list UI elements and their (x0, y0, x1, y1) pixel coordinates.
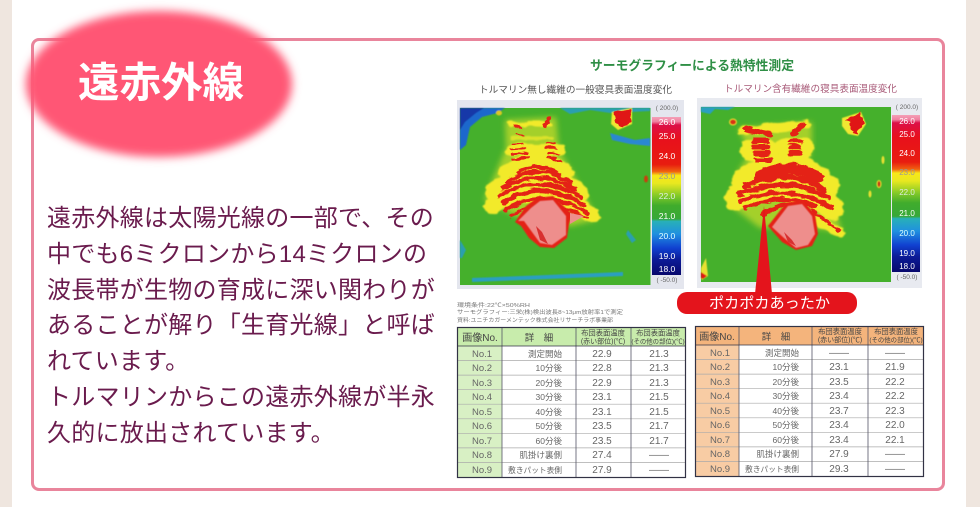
table: without tourmaline: 22.9 (592, 378, 612, 389)
table: with tourmaline: No.1 (710, 348, 730, 359)
table: with tourmaline: ―― (885, 348, 905, 359)
table: with tourmaline: 22.2 (885, 391, 905, 402)
body text: 遠赤外線は太陽光線の一部で、その (47, 205, 434, 232)
table: without tourmaline: 肌掛け裏側 (519, 450, 562, 460)
body text: れています。 (47, 348, 189, 375)
colour scale: left: 25.0 (659, 131, 676, 141)
hot spot: left image (614, 109, 631, 128)
table: without tourmaline: 布団表面温度 (581, 328, 625, 338)
table: with tourmaline: 布団表面温度 (818, 327, 862, 336)
heading: thermography: サーモグラフィーによる熱特性測定 (590, 58, 794, 73)
table: without tourmaline: 27.4 (592, 450, 612, 461)
table: with tourmaline: 23.4 (829, 391, 849, 402)
table: with tourmaline: 23.5 (829, 377, 849, 388)
table: without tourmaline: 30分後 (536, 392, 562, 402)
table: with tourmaline: 40分後 (773, 406, 799, 416)
table: with tourmaline: 23.4 (829, 435, 849, 446)
table: without tourmaline: 画像No. (462, 331, 498, 344)
table: without tourmaline: 22.8 (592, 363, 612, 374)
table: with tourmaline: 測定開始 (765, 348, 799, 358)
side band left (0, 0, 12, 507)
colour scale: right: 26.0 (899, 117, 915, 126)
table: without tourmaline: 詳 細 (525, 332, 553, 344)
table: with tourmaline: 20分後 (773, 377, 799, 387)
colour scale: left: 24.0 (659, 151, 676, 161)
table: with tourmaline: 22.0 (885, 420, 905, 431)
table: without tourmaline: 21.7 (649, 421, 669, 432)
colour scale: right: 25.0 (899, 130, 915, 139)
table: with tourmaline: 22.3 (885, 406, 905, 417)
table: with tourmaline: ―― (829, 348, 849, 359)
table: with tourmaline: 30分後 (773, 391, 799, 401)
table: without tourmaline: 布団表面温度 (636, 328, 680, 338)
table: without tourmaline: 20分後 (536, 378, 562, 388)
colour scale: right: 24.0 (899, 149, 915, 158)
body text: 久的に放出されています。 (47, 420, 335, 447)
table: without tourmaline: 22.9 (592, 349, 612, 360)
table: with tourmaline: No.7 (710, 435, 730, 446)
colour scale: right: ( -50.0) (897, 274, 917, 281)
colour scale: left: 20.0 (659, 231, 676, 241)
table: without tourmaline: 10分後 (536, 363, 562, 373)
caption: test conditions: 資料:ユニチカガーメンテック株式会社リサーチラボ事業部 (457, 316, 613, 324)
colour scale: right: 19.0 (899, 249, 915, 258)
table: without tourmaline: 測定開始 (528, 349, 562, 359)
table: without tourmaline: 敷きパット表側 (508, 465, 562, 475)
colour scale: right: 21.0 (899, 209, 915, 218)
table: without tourmaline: 23.1 (592, 392, 612, 403)
table: without tourmaline: No.7 (472, 436, 492, 447)
table: without tourmaline: 23.1 (592, 407, 612, 418)
colour scale: left: ( 200.0) (656, 105, 678, 112)
table: with tourmaline: No.9 (710, 464, 730, 475)
callout: warm label (677, 206, 857, 314)
colour scale: right: 23.0 (899, 168, 915, 177)
table: without tourmaline: No.4 (472, 392, 492, 403)
table: without tourmaline: 21.3 (649, 349, 669, 360)
table: with tourmaline: ―― (885, 449, 905, 460)
body text: 中でも6ミクロンから14ミクロンの (47, 241, 427, 268)
table: without tourmaline: 21.3 (649, 378, 669, 389)
table: with tourmaline: 敷きパット表側 (745, 464, 799, 474)
table: with tourmaline: 50分後 (773, 420, 799, 430)
hot spot: right image (845, 113, 864, 133)
callout: warm label: ポカポカあったか (709, 295, 830, 312)
table: with tourmaline: 23.7 (829, 406, 849, 417)
colour scale: left: 21.0 (659, 211, 676, 221)
table: with tourmaline (695, 326, 924, 476)
table: without tourmaline: (赤い部位)(℃) (581, 336, 625, 346)
table: with tourmaline: No.2 (710, 362, 730, 373)
thermogram: with tourmaline (697, 98, 922, 288)
table: with tourmaline: 27.9 (829, 449, 849, 460)
caption: test conditions (457, 301, 623, 324)
side band right (966, 0, 980, 507)
table: without tourmaline: No.2 (472, 363, 492, 374)
colour scale: right (892, 104, 920, 281)
table: without tourmaline (457, 327, 686, 478)
table: without tourmaline: 21.3 (649, 363, 669, 374)
badge: blurred pink ellipse (19, 4, 299, 164)
table: without tourmaline: 23.5 (592, 436, 612, 447)
table: without tourmaline: 40分後 (536, 407, 562, 417)
table: with tourmaline: 画像No. (699, 330, 735, 343)
table: without tourmaline: No.9 (472, 465, 492, 476)
table: with tourmaline: 29.3 (829, 464, 849, 475)
table: without tourmaline: (その他の部位)(℃) (631, 336, 685, 346)
table: with tourmaline: No.6 (710, 420, 730, 431)
colour scale: right: 20.0 (899, 229, 915, 238)
table: with tourmaline: No.8 (710, 449, 730, 460)
body text: 波長帯が生物の育成に深い関わりが (47, 277, 435, 304)
table: with tourmaline: (赤い部位)(℃) (818, 335, 862, 344)
body text: トルマリンからこの遠赤外線が半永 (47, 384, 435, 411)
table: with tourmaline: No.4 (710, 391, 730, 402)
subheading: without tourmaline: トルマリン無し繊維の一般寝具表面温度変化 (479, 84, 672, 96)
table: without tourmaline: 21.5 (649, 407, 669, 418)
table: with tourmaline: 22.2 (885, 377, 905, 388)
table: with tourmaline: 布団表面温度 (874, 327, 918, 336)
table: without tourmaline: 60分後 (536, 436, 562, 446)
table: with tourmaline: 肌掛け裏側 (756, 449, 799, 459)
colour scale: right: 22.0 (899, 188, 915, 197)
thermogram: without tourmaline (457, 100, 684, 289)
table: without tourmaline: No.3 (472, 378, 492, 389)
table: without tourmaline: No.1 (472, 349, 492, 360)
table: without tourmaline: 50分後 (536, 421, 562, 431)
table: with tourmaline: 23.1 (829, 362, 849, 373)
table: with tourmaline: 10分後 (773, 362, 799, 372)
colour scale: right: ( 200.0) (896, 104, 918, 111)
table: with tourmaline: 21.9 (885, 362, 905, 373)
body text: あることが解り「生育光線」と呼ば (47, 312, 435, 339)
subheading: with tourmaline: トルマリン含有繊維の寝具表面温度変化 (724, 83, 897, 95)
table: without tourmaline: 27.9 (592, 465, 612, 476)
table: with tourmaline: 23.4 (829, 420, 849, 431)
title: 遠赤外線 (78, 59, 244, 106)
table: with tourmaline: No.3 (710, 377, 730, 388)
colour scale: left: 23.0 (659, 171, 676, 181)
table: without tourmaline: 21.5 (649, 392, 669, 403)
table: with tourmaline: (その他の部位)(℃) (869, 335, 923, 344)
caption: test conditions: 環境条件:22℃×50%RH (457, 301, 530, 309)
colour scale: left (652, 105, 681, 284)
table: without tourmaline: No.6 (472, 421, 492, 432)
table: with tourmaline: 詳 細 (762, 331, 790, 343)
body text (47, 205, 435, 447)
colour scale: left: ( -50.0) (657, 277, 677, 284)
colour scale: left: 18.0 (659, 264, 676, 274)
table: without tourmaline: 21.7 (649, 436, 669, 447)
table: without tourmaline: ―― (649, 450, 669, 461)
caption: test conditions: サーモグラフィー:三栄(株)検出波長8~13μm放射率1で測定 (457, 308, 623, 316)
colour scale: left: 22.0 (659, 191, 676, 201)
colour scale: left: 26.0 (659, 117, 676, 127)
table: without tourmaline: 23.5 (592, 421, 612, 432)
table: without tourmaline: ―― (649, 465, 669, 476)
colour scale: left: 19.0 (659, 251, 676, 261)
table: without tourmaline: No.5 (472, 407, 492, 418)
table: with tourmaline: 22.1 (885, 435, 905, 446)
table: with tourmaline: No.5 (710, 406, 730, 417)
colour scale: right: 18.0 (899, 262, 915, 271)
table: without tourmaline: No.8 (472, 450, 492, 461)
table: with tourmaline: 60分後 (773, 435, 799, 445)
table: with tourmaline: ―― (885, 464, 905, 475)
